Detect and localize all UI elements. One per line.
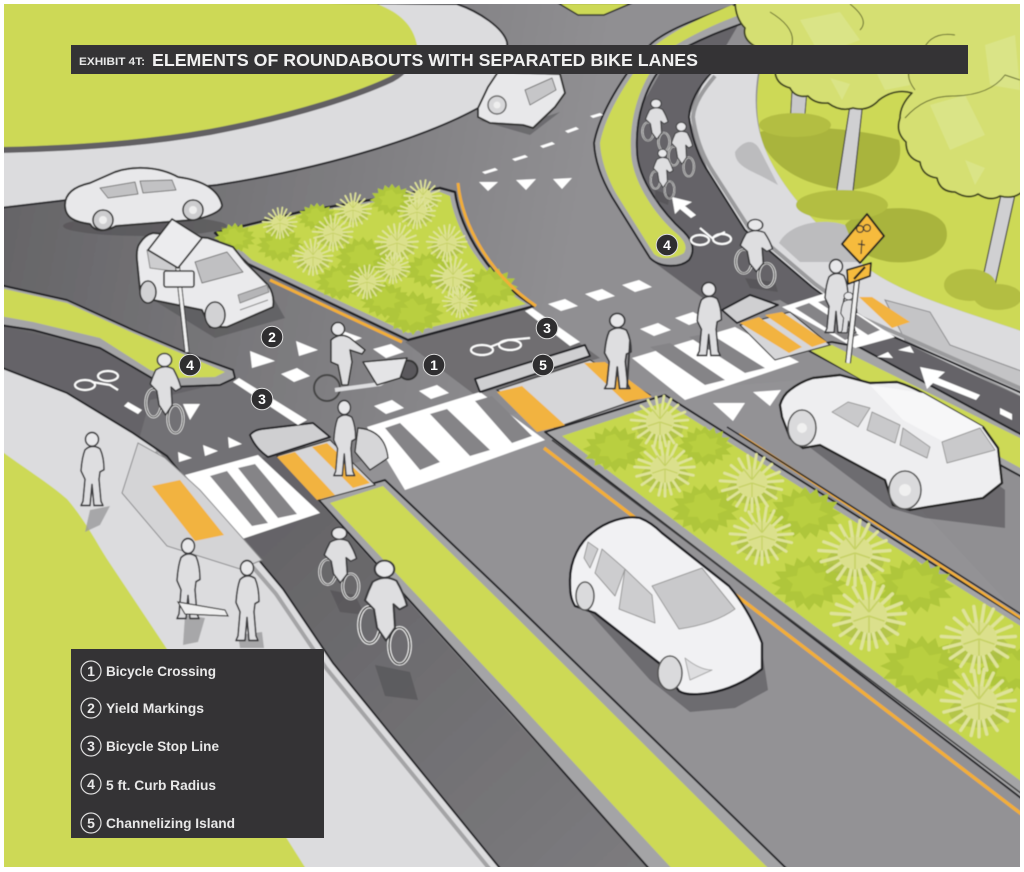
callout 1	[423, 354, 445, 376]
ground shadows of people	[85, 506, 264, 648]
callout 3 right	[536, 317, 558, 339]
upper right bike lane	[612, 22, 1024, 436]
sidewalk ramp	[885, 300, 1024, 398]
lane arrows	[672, 197, 980, 400]
title bar: ELEMENTS OF ROUNDABOUTS WITH SEPARATED BIKE LANES	[152, 50, 698, 70]
legend item 3: 3	[87, 738, 95, 754]
car: SUV	[780, 375, 1005, 528]
lower green strip	[318, 480, 790, 872]
left green splitter with curb	[0, 285, 235, 387]
sign: bike and pedestrian warning	[842, 214, 884, 363]
crossing zone between bike lane segments	[140, 380, 294, 474]
legend item 2	[81, 698, 204, 718]
legend item 2: 2	[87, 700, 95, 716]
legend item 1	[81, 661, 216, 681]
callout 5: 5	[539, 357, 547, 373]
bike crossing dark band	[405, 307, 600, 395]
callout 1: 1	[430, 357, 438, 373]
car: boxy van	[137, 233, 285, 338]
crosswalks	[185, 293, 895, 539]
legend item 5: Channelizing Island	[106, 816, 235, 831]
callout 3 left: 3	[258, 391, 266, 407]
legend item 2: Yield Markings	[106, 701, 204, 716]
car: jeep	[478, 72, 565, 135]
refuge islands with gold strips	[277, 297, 910, 500]
upper right green splitter with curb	[594, 5, 752, 266]
sign: back of sign, left	[148, 219, 202, 352]
center gold edge lines	[270, 183, 536, 342]
lower left lawn	[0, 450, 308, 872]
legend item 4	[81, 774, 216, 794]
title bar	[71, 45, 968, 74]
left sidewalk curb ramp	[122, 443, 262, 569]
callout 2	[261, 326, 283, 348]
legend item 3: Bicycle Stop Line	[106, 739, 219, 754]
lower median planted island	[545, 395, 1024, 805]
title bar: EXHIBIT 4T:	[79, 56, 145, 68]
callout 4 left: 4	[186, 357, 194, 373]
callout 3 left	[251, 388, 273, 410]
top small island	[558, 3, 632, 15]
callout 4 right: 4	[663, 237, 671, 253]
legend item 5	[81, 813, 235, 833]
bike stencils	[75, 228, 731, 390]
right green strip	[800, 342, 1024, 478]
legend item 1: 1	[87, 663, 95, 679]
central island top-left lawn and ring sidewalk	[0, 0, 508, 208]
lower left bike lane	[68, 344, 646, 867]
center planted island	[214, 180, 534, 340]
channelizing islands	[250, 295, 778, 457]
legend panel	[71, 649, 324, 838]
legend item 1: Bicycle Crossing	[106, 664, 216, 679]
legend item 4: 4	[87, 776, 95, 792]
trees	[735, 0, 1024, 310]
road surface	[4, 4, 1020, 616]
callout 5	[532, 354, 554, 376]
legend item 4: 5 ft. Curb Radius	[106, 778, 216, 793]
sidewalk tree shadow	[735, 142, 860, 262]
upper right sidewalk	[689, 62, 1024, 400]
lower left sidewalk	[0, 367, 503, 872]
lawn shadows	[758, 127, 947, 262]
callout 3 right: 3	[543, 320, 551, 336]
car: hatchback	[570, 517, 768, 712]
upper right lawn	[751, 44, 1020, 331]
cargo bike rider	[314, 322, 418, 401]
road markings: squares, stop lines, yield triangles	[124, 113, 1012, 462]
road gold lines	[544, 427, 1024, 816]
callout 4 right	[656, 234, 678, 256]
cyclists	[146, 99, 775, 664]
pedestrians	[81, 260, 857, 640]
callout 2: 2	[268, 329, 276, 345]
car: sedan	[63, 168, 227, 236]
main road lower tone	[354, 460, 458, 546]
legend item 5: 5	[87, 815, 95, 831]
legend item 3	[81, 736, 219, 756]
callout 4 left	[179, 354, 201, 376]
